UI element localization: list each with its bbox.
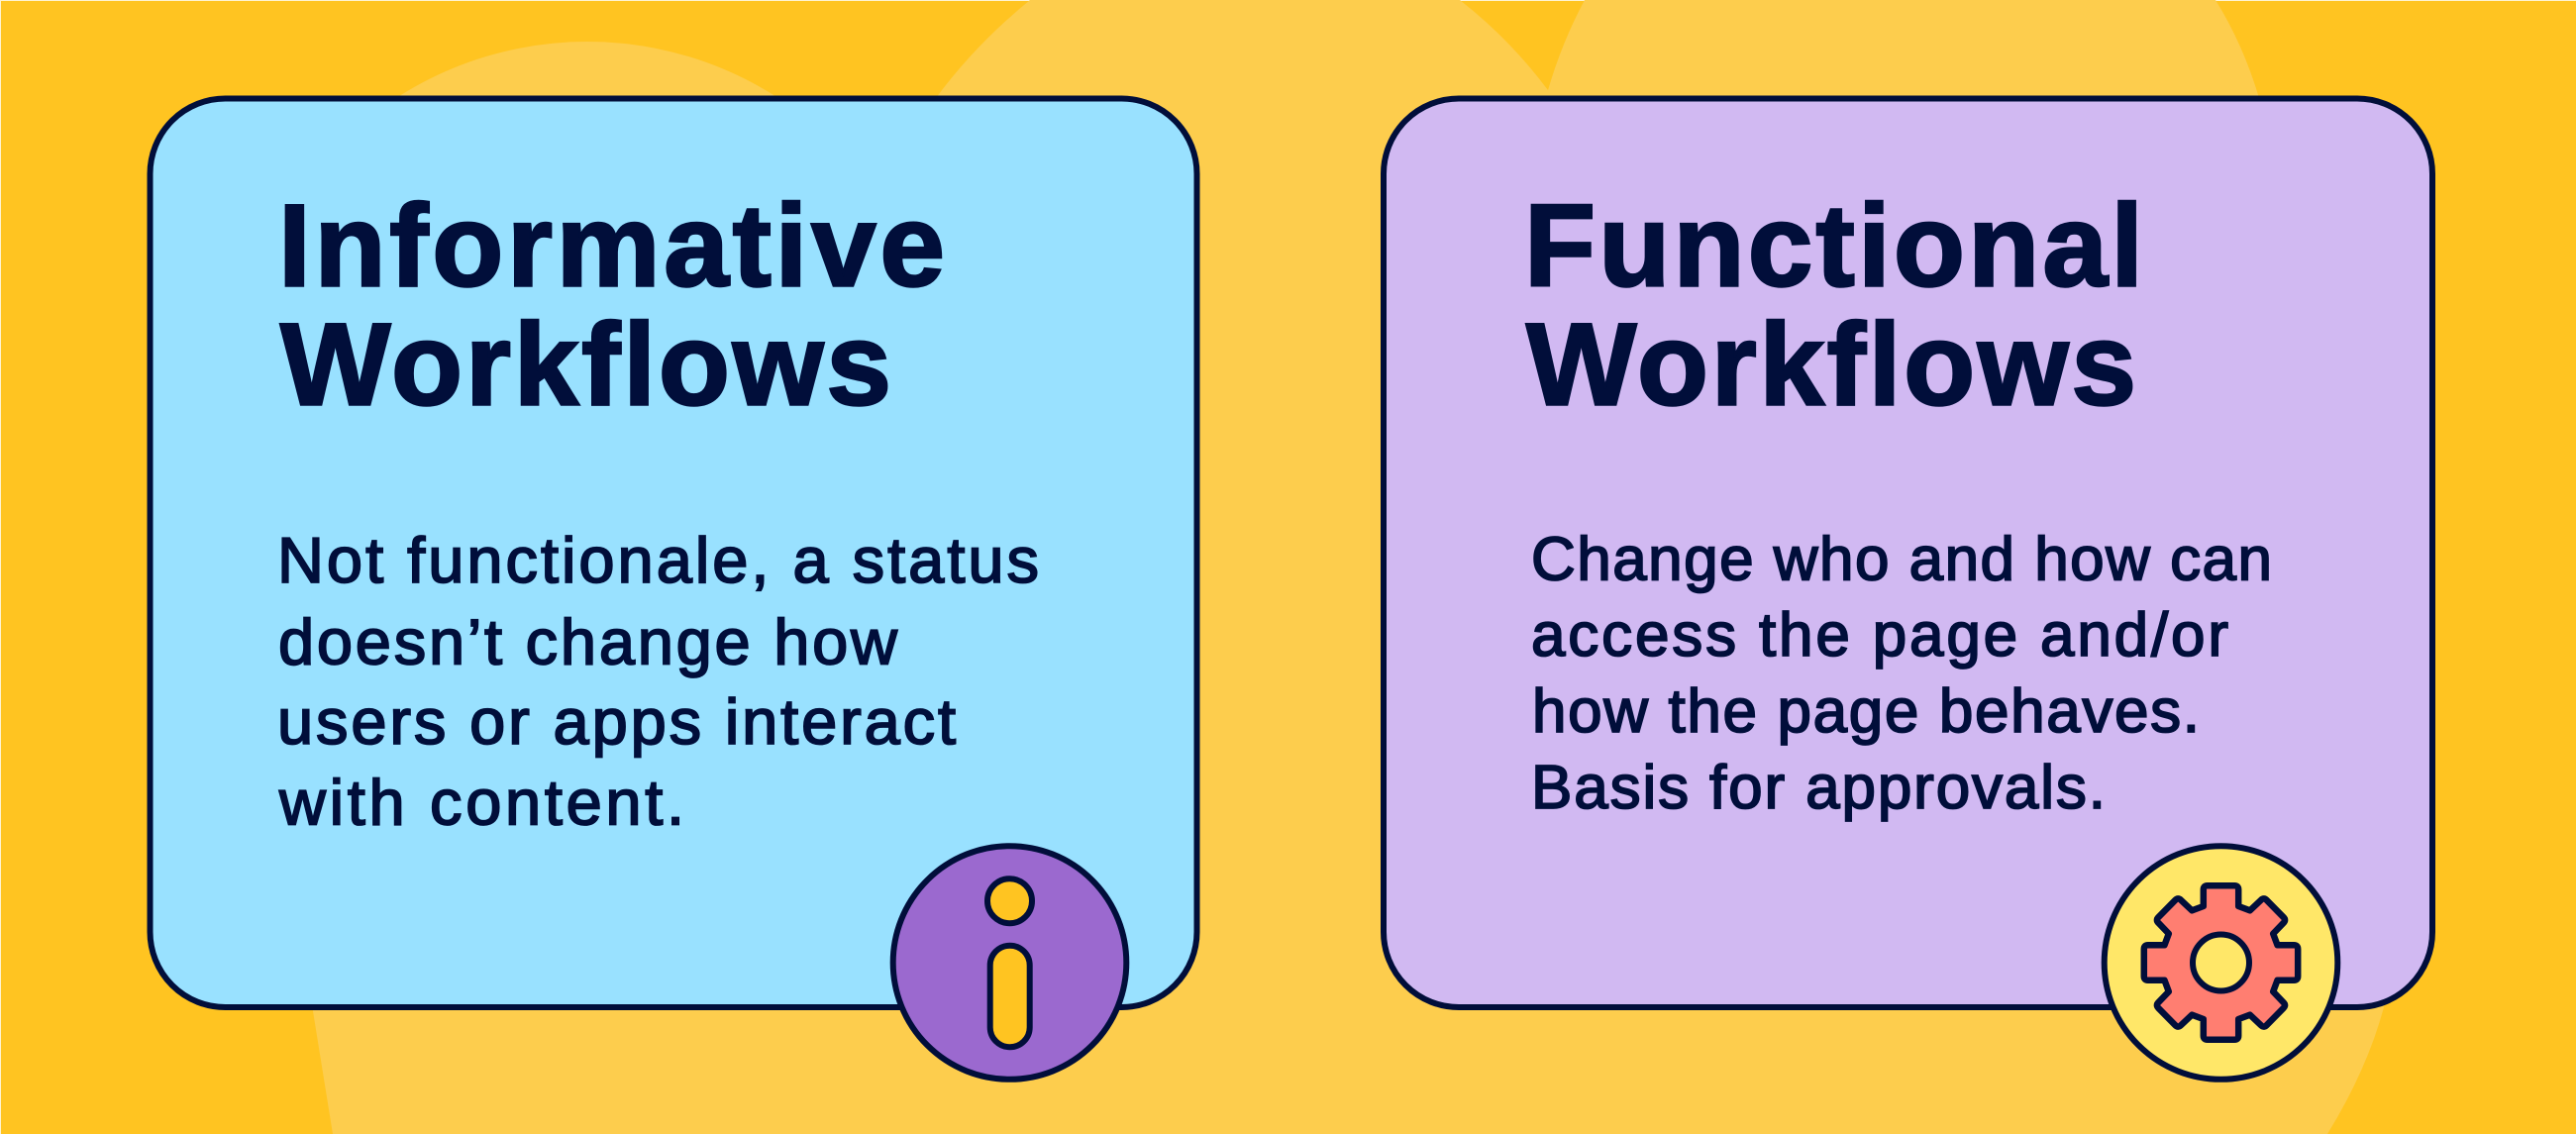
background blob: top left circle — [236, 42, 939, 745]
card background: functional — [1384, 99, 2432, 1007]
card background: informative — [151, 99, 1196, 1007]
body text: informative description: with content. — [278, 767, 684, 839]
heading: functional workflows: Workflows — [1526, 300, 2136, 431]
body text: functional description: Basis for approvals. — [1531, 754, 2106, 822]
heading: informative workflows: Informative — [278, 181, 945, 312]
heading: functional workflows — [1524, 181, 2143, 431]
body text: functional description: Change who and how can — [1531, 525, 2272, 593]
heading: functional workflows: Functional — [1524, 181, 2143, 312]
body text: informative description — [277, 524, 1039, 839]
icon: gear — [2105, 846, 2337, 1080]
body text: functional description: access the page and/or — [1531, 601, 2228, 670]
panel: informative workflows — [151, 99, 1196, 1080]
heading: informative workflows: Workflows — [280, 300, 891, 431]
body text: informative description: users or apps interact — [277, 685, 956, 758]
heading: informative workflows — [278, 181, 945, 431]
body text: informative description: Not functionale, a status — [277, 524, 1039, 596]
panel: functional workflows — [1384, 99, 2432, 1080]
body text: functional description — [1531, 525, 2272, 822]
body text: functional description: how the page behaves. — [1532, 677, 2200, 746]
body text: informative description: doesn’t change how — [278, 606, 898, 678]
icon: information — [893, 846, 1126, 1080]
